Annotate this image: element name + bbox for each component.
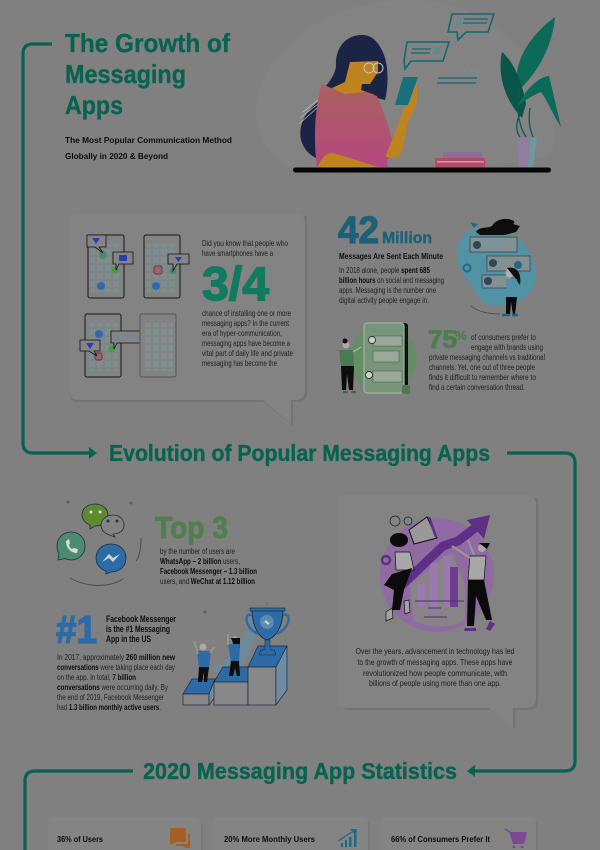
gear bbox=[382, 556, 390, 564]
plant bbox=[501, 17, 561, 137]
number one subheading: is the #1 Messaging bbox=[106, 624, 170, 634]
icon: growth chart bbox=[338, 829, 357, 847]
number one subheading: Facebook Messenger bbox=[106, 614, 176, 624]
stat card: 36% of users bbox=[48, 817, 203, 850]
75 percent text: finds it difficult to remember where to bbox=[429, 373, 536, 382]
stat subheading: Messages Are Sent Each Minute bbox=[339, 251, 443, 261]
intro text: Did you know that people who bbox=[202, 239, 288, 248]
stat card: 66% of consumers prefer bbox=[381, 817, 538, 850]
75 percent text: engage with brands using bbox=[471, 343, 543, 352]
body text: vital part of daily life and private bbox=[202, 349, 293, 358]
person bbox=[228, 634, 240, 676]
subtitle: The Most Popular Communication Method bbox=[65, 135, 232, 145]
coin icons bbox=[390, 516, 412, 526]
card text: to the growth of messaging apps. These apps have bbox=[358, 657, 513, 667]
panel: technology advancement callout bbox=[338, 495, 538, 728]
75 percent text: private messaging channels vs traditional bbox=[429, 353, 545, 362]
icon: whatsapp bbox=[57, 532, 85, 560]
75 percent text bbox=[429, 333, 545, 392]
stat: 75%: 75 bbox=[428, 326, 457, 354]
card text: Over the years, advancement in technology has led bbox=[356, 646, 515, 656]
card body bbox=[338, 495, 536, 727]
75 percent text: find a certain conversation thread. bbox=[429, 383, 525, 392]
75 percent text: channels. Yet, one out of three people bbox=[429, 363, 535, 372]
icon: chat bubbles bbox=[170, 828, 190, 848]
trophy bbox=[246, 608, 289, 655]
number one text: conversations were occurring daily. By bbox=[57, 683, 168, 692]
subtitle bbox=[65, 135, 232, 161]
top 3 text: WhatsApp – 2 billion users, bbox=[160, 557, 240, 566]
body text bbox=[202, 309, 293, 368]
42 million text: In 2018 alone, people spent 685 bbox=[339, 266, 430, 275]
plant pot bbox=[517, 138, 537, 167]
typing lines bbox=[437, 70, 479, 83]
heading: statistics: 2020 Messaging App Statistics bbox=[143, 758, 457, 784]
42 million text: billion hours on social and messaging bbox=[339, 276, 444, 285]
phone bbox=[395, 77, 418, 105]
title: Apps bbox=[65, 90, 123, 120]
icon: wechat bbox=[82, 504, 124, 537]
paper bbox=[346, 168, 400, 171]
42 million text: digital activity people engage in. bbox=[339, 296, 429, 305]
number one subheading bbox=[106, 614, 176, 644]
number one subheading: App in the US bbox=[106, 634, 151, 644]
connector line: evolution heading to statistics heading bbox=[467, 453, 575, 777]
panel: 3/4 smartphones callout bbox=[70, 213, 307, 426]
card heading: 66% of Consumers Prefer It bbox=[391, 834, 490, 844]
stat: 42 Million: 42 bbox=[338, 210, 379, 252]
title: Messaging bbox=[65, 59, 186, 89]
books bbox=[435, 152, 485, 168]
man pushing arrow bbox=[452, 540, 495, 631]
number one text: had 1.3 billion monthly active users. bbox=[57, 703, 161, 712]
number one text: on the app. In total, 7 billion bbox=[57, 673, 136, 682]
card body bbox=[70, 213, 305, 424]
illustration: green chat phone bbox=[339, 323, 417, 394]
illustration: trophy on podium bbox=[183, 602, 289, 705]
illustration: growth chart with megaphone bbox=[380, 515, 495, 632]
42 million text bbox=[339, 266, 444, 305]
body text: chance of installing one or more bbox=[202, 309, 291, 318]
top 3 text: Facebook Messenger – 1.3 billion bbox=[160, 567, 257, 576]
subtitle: Globally in 2020 & Beyond bbox=[65, 151, 168, 161]
intro text bbox=[202, 239, 288, 258]
card text: revolutionized how people communicate, with bbox=[363, 668, 507, 678]
top 3 text: by the number of users are bbox=[160, 547, 235, 556]
stat: 3/4: 3/4 bbox=[202, 257, 269, 310]
title bbox=[65, 28, 230, 120]
podium bbox=[183, 646, 287, 705]
speech bubble bbox=[448, 14, 494, 40]
connector line: statistics heading down the left edge bbox=[25, 771, 133, 850]
body text: messaging apps? In the current bbox=[202, 319, 290, 328]
42 million text: apps. Messaging is the number one bbox=[339, 286, 436, 295]
icons: messaging app logos bbox=[57, 500, 141, 585]
card shadow bbox=[341, 498, 538, 728]
icon: shopping cart bbox=[505, 829, 527, 848]
number one text: the end of 2019, Facebook Messenger bbox=[57, 693, 164, 702]
heading: evolution: Evolution of Popular Messaging Apps bbox=[109, 440, 490, 466]
75 percent text: of consumers prefer to bbox=[471, 333, 536, 342]
person bbox=[194, 641, 214, 682]
top 3 text bbox=[160, 547, 257, 586]
card text: billions of people using more than one app. bbox=[369, 678, 501, 688]
body text: messaging has become the bbox=[202, 359, 277, 368]
number one text: In 2017, approximately 260 million new bbox=[57, 653, 176, 662]
woman bbox=[299, 35, 417, 167]
stat: #1: #1 bbox=[56, 609, 97, 652]
title: The Growth of bbox=[65, 28, 230, 58]
card heading: 36% of Users bbox=[57, 834, 103, 844]
hero background blob bbox=[256, 0, 554, 169]
body text: messaging apps have become a bbox=[202, 339, 290, 348]
phones bbox=[80, 235, 189, 377]
number one text bbox=[57, 653, 176, 712]
speech bubble bbox=[404, 42, 449, 69]
intro text: have smartphones have a bbox=[202, 249, 273, 258]
number one text: conversations were taking place each day bbox=[57, 663, 175, 672]
card shadow bbox=[70, 216, 307, 426]
top 3 text: users, and WeChat at 1.12 billion bbox=[160, 577, 255, 586]
stat card: 20% more monthly users bbox=[213, 817, 370, 850]
body text: era of hyper-communication, bbox=[202, 329, 282, 338]
desk bbox=[293, 168, 551, 172]
stat: 75%: % bbox=[455, 328, 467, 343]
stat: top 3: Top 3 bbox=[155, 510, 228, 545]
growth arrow bbox=[403, 515, 490, 584]
card text bbox=[356, 646, 515, 688]
connector line: top left to evolution heading bbox=[23, 44, 97, 459]
card heading: 20% More Monthly Users bbox=[224, 834, 315, 844]
hero illustration: woman with phone and plant bbox=[256, 0, 561, 172]
icon: messenger bbox=[96, 544, 126, 574]
stat: 42 Million: Million bbox=[382, 230, 432, 247]
stat: 42 Million bbox=[338, 210, 432, 252]
illustration: teal messaging blob bbox=[457, 219, 536, 315]
woman with megaphone bbox=[384, 517, 437, 621]
